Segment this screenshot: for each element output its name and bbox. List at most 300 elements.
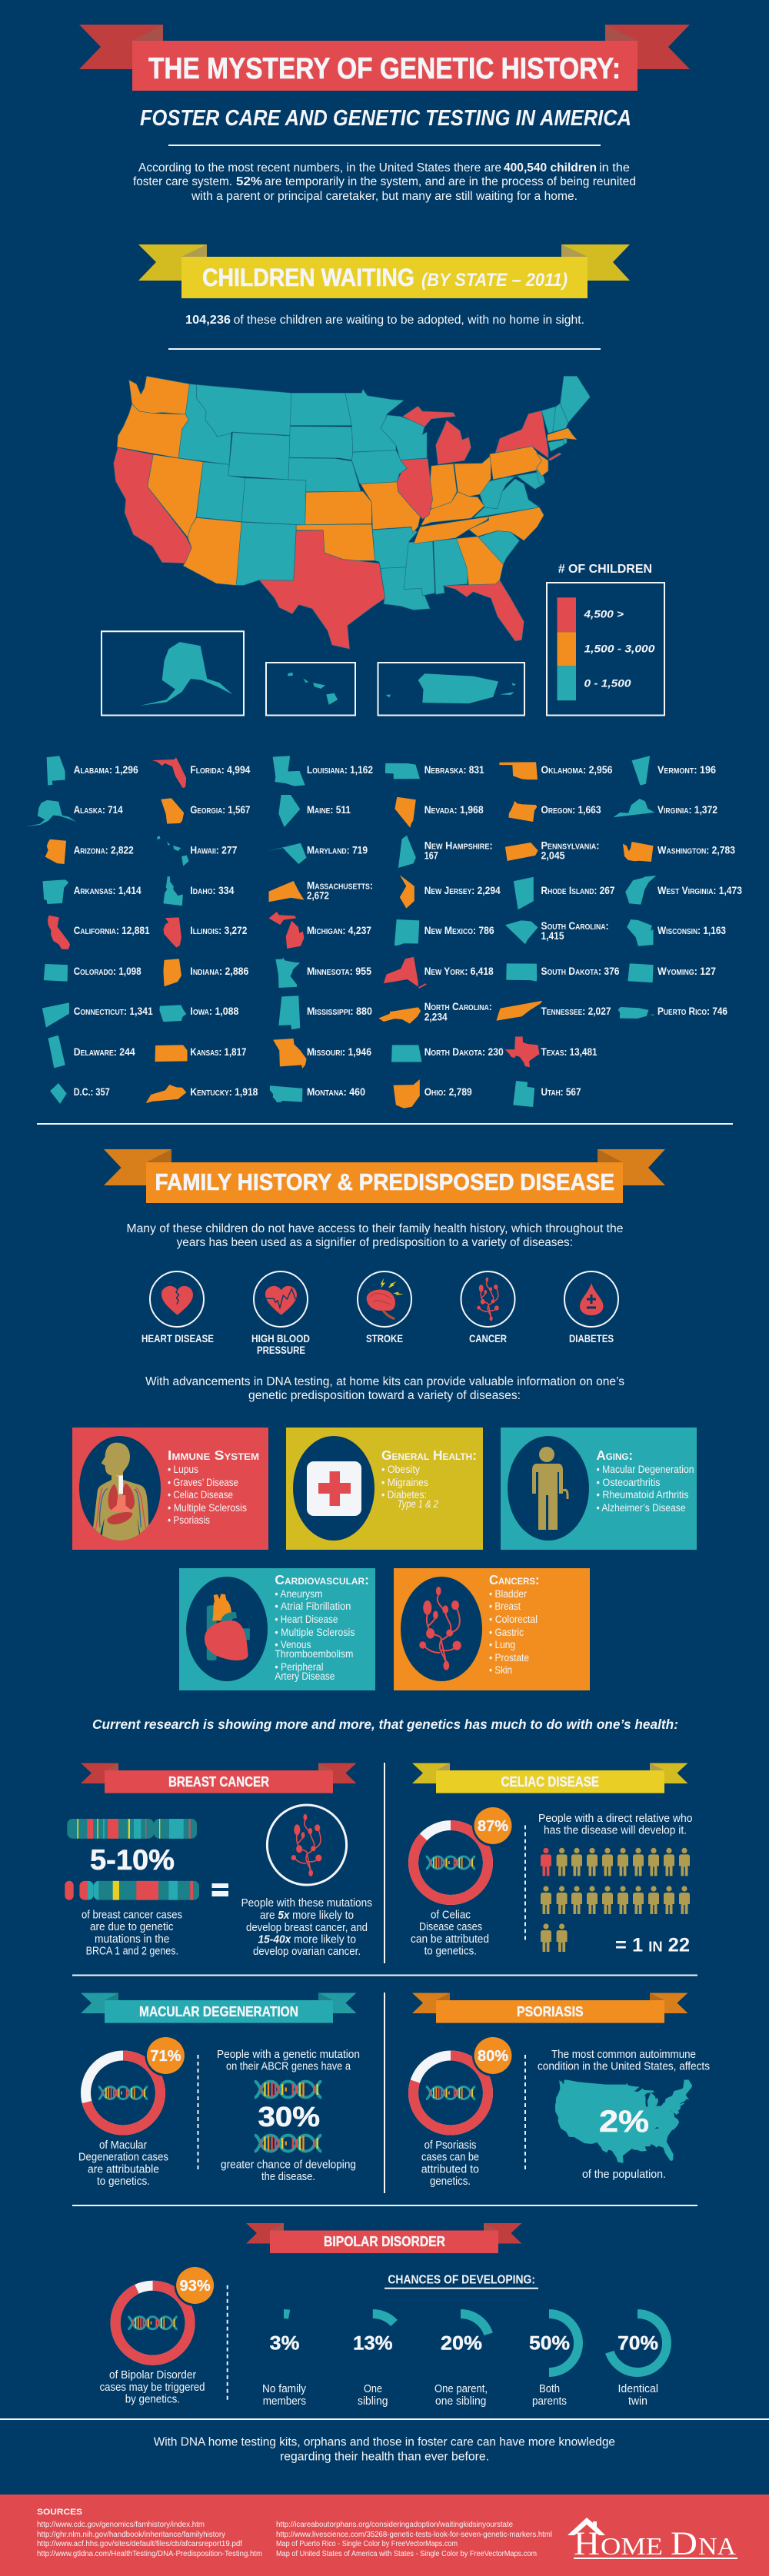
state: Iowa: Iowa: 1,088 <box>190 1005 239 1017</box>
panel: cancers: • Skin <box>489 1664 512 1676</box>
state: Vermont: Vermont: 196 <box>657 763 716 776</box>
state: Rhode Island <box>514 877 615 909</box>
research statement: Current research is showing more and more, that genetics has much to do with one’s health: <box>92 1717 678 1732</box>
breast cancer caption: mutations in the <box>95 1933 169 1946</box>
state: New Hampshire: New Hampshire: <box>424 839 493 851</box>
intro paragraph: in the <box>599 161 630 175</box>
state: Missouri: Missouri: 1,946 <box>307 1045 371 1058</box>
ABCR text with 30% stat: 30% <box>258 2101 320 2132</box>
state: North Carolina: North Carolina: <box>424 1000 492 1012</box>
sources: http://www.livescience.com/35268-genetic-tests-look-for-seven-genetic-markers.html <box>276 2531 552 2539</box>
autoimmune text: condition in the United States, affects <box>538 2060 710 2072</box>
title ribbon: THE MYSTERY OF GENETIC HISTORY: <box>148 52 621 85</box>
panel: psoriasis <box>412 1993 710 2188</box>
bipolar caption <box>100 2369 205 2406</box>
celiac caption <box>411 1910 489 1958</box>
state: Wisconsin <box>627 919 726 946</box>
logo: Home DNA: OME <box>601 2532 663 2560</box>
panel: cardiovascular: • Aneurysm <box>275 1588 322 1600</box>
state: Idaho <box>163 876 235 906</box>
ribbon: children waiting: CHILDREN WAITING <box>202 264 414 291</box>
legend: number of children: 0 - 1,500 <box>584 676 631 689</box>
panel: cardiovascular: • Atrial Fibrillation <box>275 1600 351 1612</box>
panel: bipolar disorder <box>100 2223 667 2408</box>
state: Tennessee <box>496 1001 611 1021</box>
ribbon: family history: FAMILY HISTORY & PREDISPOSED DISEASE <box>155 1168 614 1195</box>
macular caption: are attributable <box>88 2163 159 2175</box>
waiting statement: of these children are waiting to be adopted, with no home in sight. <box>234 314 584 327</box>
state: North Dakota <box>391 1045 504 1062</box>
arc: 13% one sibling <box>344 2314 402 2408</box>
panel: general health: General Health: <box>381 1448 477 1463</box>
state: Nebraska <box>385 763 484 779</box>
sources: http://icareaboutorphans.org/consideringadoption/waitingkidsinyourstate <box>276 2521 513 2529</box>
state: Louisiana: Louisiana: 1,162 <box>307 763 373 776</box>
stat: 5-10%: 5-10% <box>90 1844 175 1876</box>
state: Oklahoma: Oklahoma: 2,956 <box>541 763 613 776</box>
panel: cardiovascular: • Peripheral <box>275 1661 323 1673</box>
sources: sources <box>37 2505 82 2518</box>
donut: 71%: 71% <box>150 2048 181 2065</box>
panel: cardiovascular: • Multiple Sclerosis <box>275 1627 355 1638</box>
inset: Alaska box <box>102 631 244 715</box>
state: Utah <box>513 1081 581 1107</box>
state: Ohio <box>394 1079 472 1109</box>
arc: 20% one parent one sibling <box>431 2314 490 2408</box>
state: Minnesota <box>275 957 371 988</box>
panel: immune system: • Multiple Sclerosis <box>168 1502 247 1514</box>
state: Kentucky: Kentucky: 1,918 <box>190 1085 258 1098</box>
state: Nevada <box>394 797 484 828</box>
icon: cancer circle <box>267 1805 347 1885</box>
DNA testing paragraph: genetic predisposition toward a variety of diseases: <box>248 1389 521 1402</box>
ribbon: children waiting: (BY STATE – 2011) <box>421 270 568 291</box>
breast cancer caption: of breast cancer cases <box>82 1910 182 1922</box>
intro paragraph: According to the most recent numbers, in the United States there are <box>138 161 501 175</box>
icon: cancer <box>461 1271 515 1345</box>
state: Massachusetts: 2,672 <box>307 889 329 901</box>
ribbon: bipolar disorder: BIPOLAR DISORDER <box>324 2234 445 2249</box>
state: Texas: Texas: 13,481 <box>541 1045 598 1058</box>
sources: Map of United States of America with States - Single Color by FreeVectorMaps.com <box>276 2550 537 2558</box>
DNA testing paragraph: With advancements in DNA testing, at home kits can provide valuable information on one’s <box>145 1375 624 1388</box>
state: Puerto Rico <box>618 1005 727 1019</box>
icon: high blood pressure: HIGH BLOOD <box>251 1332 310 1345</box>
state: Virginia: Virginia: 1,372 <box>657 803 717 816</box>
icon: stroke <box>358 1271 411 1345</box>
bipolar caption: of Bipolar Disorder <box>109 2369 196 2382</box>
panel: cancers: • Colorectal <box>489 1614 538 1625</box>
icon: diabetes <box>564 1271 618 1345</box>
chromosome top <box>67 1819 197 1839</box>
panel: cancers: • Breast <box>489 1600 521 1612</box>
ribbon: macular degeneration: MACULAR DEGENERATION <box>139 2004 298 2019</box>
state: Michigan: Michigan: 4,237 <box>307 924 371 936</box>
ribbon: celiac disease <box>412 1763 687 1793</box>
panel: cardiovascular: • Heart Disease <box>275 1614 338 1625</box>
state: Alabama: Alabama: 1,296 <box>74 763 138 776</box>
state: North Carolina <box>378 1000 492 1024</box>
ABCR text with 30% stat <box>217 2049 360 2183</box>
state: Utah: Utah: 567 <box>541 1085 581 1098</box>
panel: cardiovascular: Cardiovascular: <box>275 1572 369 1587</box>
legend: number of children <box>547 563 664 715</box>
state: Connecticut: Connecticut: 1,341 <box>74 1005 153 1017</box>
logo: Home DNA: D <box>671 2526 697 2562</box>
panel: cardiovascular: Artery Disease <box>275 1670 335 1682</box>
state: Louisiana <box>273 756 373 786</box>
donut: 93%: 93% <box>180 2278 211 2295</box>
stat: 1 in 22: = 1 in 22 <box>615 1935 690 1956</box>
state: Indiana: Indiana: 2,886 <box>190 965 249 977</box>
arc: 3% no family members: 3% <box>270 2333 299 2355</box>
state: New Hampshire: 167 <box>424 849 438 862</box>
panel: aging: • Alzheimer’s Disease <box>597 1502 686 1514</box>
state: Alaska <box>25 800 123 826</box>
icon: high blood pressure <box>251 1271 310 1356</box>
state: California: California: 12,881 <box>74 924 150 936</box>
arc: 70% identical twin <box>608 2314 667 2408</box>
donut: 93% <box>115 2265 216 2360</box>
relative text <box>538 1813 693 1837</box>
state: Arizona <box>45 839 134 864</box>
arc: 13% one sibling: 13% <box>353 2333 393 2355</box>
equals sign <box>212 1883 228 1896</box>
autoimmune text: The most common autoimmune <box>551 2049 696 2061</box>
state: Colorado: Colorado: 1,098 <box>74 965 141 977</box>
state: Alabama <box>47 756 138 786</box>
ribbon: macular degeneration <box>81 1993 357 2023</box>
state: Connecticut <box>42 1002 153 1028</box>
state: Nevada: Nevada: 1,968 <box>424 803 484 816</box>
arc: 3% no family members: members <box>263 2395 306 2408</box>
mutation text <box>241 1897 372 1958</box>
sources: Map of Puerto Rico - Single Color by FreeVectorMaps.com <box>276 2540 458 2548</box>
panel: aging: • Osteoarthritis <box>597 1477 661 1488</box>
logo: Home DNA <box>568 2518 737 2562</box>
breast cancer caption <box>82 1910 182 1958</box>
state: New Jersey <box>400 875 501 909</box>
state: Missouri <box>273 1039 371 1069</box>
chromosome bottom <box>65 1881 199 1900</box>
panel: aging: • Macular Degeneration <box>597 1464 694 1475</box>
state: Oregon: Oregon: 1,663 <box>541 803 601 816</box>
legend: number of children: 4,500 > <box>583 608 624 620</box>
ribbon: breast cancer: BREAST CANCER <box>168 1774 269 1790</box>
mutation text: are 5x more likely to <box>260 1910 354 1922</box>
arc: 13% one sibling: One <box>364 2383 382 2395</box>
state: Ohio: Ohio: 2,789 <box>424 1085 472 1098</box>
sources: http://www.acf.hhs.gov/sites/default/files/cb/afcarsreport19.pdf <box>37 2540 242 2548</box>
icon: high blood pressure: PRESSURE <box>257 1344 305 1356</box>
state: Wyoming: Wyoming: 127 <box>657 965 716 977</box>
family history paragraph: Many of these children do not have access to their family health history, which throughout the <box>126 1222 623 1235</box>
state: Pennsylvania: Pennsylvania: <box>541 839 600 851</box>
ribbon: children waiting <box>138 244 630 298</box>
bipolar caption: by genetics. <box>125 2394 180 2406</box>
macular caption: to genetics. <box>97 2175 150 2188</box>
intro paragraph: with a parent or principal caretaker, but many are still waiting for a home. <box>191 190 578 203</box>
state: Nebraska: Nebraska: 831 <box>424 763 484 776</box>
donut: 80% <box>414 2035 514 2130</box>
sources: http://www.gtldna.com/HealthTesting/DNA-Predisposition-Testing.htm <box>37 2550 262 2558</box>
icon: stroke: STROKE <box>366 1332 403 1345</box>
state: Washington: Washington: 2,783 <box>657 844 735 856</box>
psoriasis caption <box>421 2139 479 2188</box>
state: New Hampshire <box>398 836 493 868</box>
US silhouette with 2% <box>555 2080 692 2163</box>
state: Pennsylvania <box>505 839 600 862</box>
state: Montana <box>270 1085 365 1102</box>
arc: 3% no family members <box>255 2314 313 2408</box>
illustration: torso with lungs <box>93 1442 149 1541</box>
state: Arkansas: Arkansas: 1,414 <box>74 884 141 896</box>
panel: general health: • Obesity <box>381 1464 420 1475</box>
state: Hawaii: Hawaii: 277 <box>190 844 238 856</box>
panel: macular degeneration <box>78 1993 360 2188</box>
arc: 13% one sibling: sibling <box>358 2395 388 2408</box>
state: Montana: Montana: 460 <box>307 1085 365 1098</box>
state: Florida: Florida: 4,994 <box>190 763 251 776</box>
state: Rhode Island: Rhode Island: 267 <box>541 884 615 896</box>
title ribbon <box>79 25 690 91</box>
celiac caption: to genetics. <box>424 1946 477 1958</box>
relative text: has the disease will develop it. <box>544 1825 687 1837</box>
state: Minnesota: Minnesota: 955 <box>307 965 371 977</box>
state: Pennsylvania: 2,045 <box>541 849 565 862</box>
autoimmune text <box>538 2049 710 2072</box>
arc: 70% identical twin: 70% <box>618 2333 658 2355</box>
population text: of the population. <box>582 2169 666 2181</box>
panel: immune system: Immune System <box>168 1448 259 1463</box>
chances heading: CHANCES OF DEVELOPING: <box>388 2274 535 2287</box>
icon: elderly man <box>532 1447 568 1530</box>
icon: diabetes: DIABETES <box>569 1332 614 1345</box>
state: Colorado <box>44 964 141 982</box>
panel: immune system: • Graves’ Disease <box>168 1477 238 1488</box>
breast cancer caption: BRCA 1 and 2 genes. <box>86 1946 178 1958</box>
ABCR text with 30% stat: greater chance of developing <box>221 2159 356 2172</box>
arc: 70% identical twin: twin <box>628 2395 647 2408</box>
panel: cancers: • Lung <box>489 1639 515 1650</box>
arc: 50% both parents: parents <box>532 2395 567 2408</box>
state: Maryland: Maryland: 719 <box>307 844 368 856</box>
legend: number of children: # OF CHILDREN <box>558 563 652 576</box>
ribbon: psoriasis <box>412 1993 687 2023</box>
ribbon: celiac disease: CELIAC DISEASE <box>501 1774 599 1790</box>
icon: heart disease <box>141 1271 214 1345</box>
state: New Mexico <box>394 919 494 946</box>
state: Illinois <box>163 917 248 948</box>
mutation text: People with these mutations <box>241 1897 372 1910</box>
icon: heart organ <box>205 1594 250 1660</box>
state: South Dakota: South Dakota: 376 <box>541 965 620 977</box>
arc: 20% one parent one sibling: one sibling <box>435 2395 486 2408</box>
state: Georgia <box>161 798 251 824</box>
state: Arizona: Arizona: 2,822 <box>74 844 134 856</box>
footer <box>0 2495 769 2576</box>
state: Massachusetts <box>269 879 373 902</box>
state: Wyoming <box>628 963 716 982</box>
donut: 80%: 80% <box>478 2048 508 2065</box>
arc: 70% identical twin: Identical <box>618 2383 658 2395</box>
panel: general health: • Migraines <box>381 1477 428 1488</box>
state: New Jersey: New Jersey: 2,294 <box>424 884 501 896</box>
state: Michigan <box>269 912 371 949</box>
arc: 50% both parents: 50% <box>529 2333 570 2355</box>
state: Florida <box>152 757 251 788</box>
state: Mississippi <box>278 995 372 1029</box>
panel: aging: • Rheumatoid Arthritis <box>597 1489 689 1501</box>
closing statement <box>154 2436 615 2464</box>
intro paragraph <box>133 161 636 203</box>
panel: immune system: • Psoriasis <box>168 1514 210 1526</box>
state: West Virginia <box>625 876 742 905</box>
family history paragraph <box>126 1222 623 1249</box>
panel: general health: • Diabetes: <box>381 1489 427 1501</box>
state: South Carolina: South Carolina: <box>541 919 609 932</box>
state: Indiana <box>163 959 249 986</box>
panel: general health <box>286 1428 483 1550</box>
state: Tennessee: Tennessee: 2,027 <box>541 1005 611 1017</box>
state: New York: New York: 6,418 <box>424 965 494 977</box>
inset: Hawaii box <box>266 663 355 715</box>
panel: immune system: • Lupus <box>168 1464 198 1475</box>
state: North Dakota: North Dakota: 230 <box>424 1045 504 1058</box>
panel: aging: Aging: <box>597 1448 633 1463</box>
celiac caption: can be attributed <box>411 1933 489 1946</box>
state: Idaho: Idaho: 334 <box>190 884 235 896</box>
arc: 20% one parent one sibling: 20% <box>441 2333 482 2355</box>
intro paragraph: are temporarily in the system, and are in the process of being reunited <box>265 175 636 188</box>
panel: cancers <box>394 1568 590 1690</box>
state: North Carolina: 2,234 <box>424 1011 448 1023</box>
state: Virginia <box>613 799 717 817</box>
state: D.C.: D.C.: 357 <box>74 1085 110 1098</box>
logo: Home DNA: NA <box>698 2532 736 2560</box>
state: D.C. <box>50 1083 110 1104</box>
US map <box>114 376 590 706</box>
ABCR text with 30% stat: People with a genetic mutation <box>217 2049 360 2061</box>
panel: cancers: • Bladder <box>489 1588 527 1600</box>
psoriasis caption: of Psoriasis <box>424 2139 477 2152</box>
panel: cancers: • Gastric <box>489 1627 524 1638</box>
state: Washington <box>623 842 735 862</box>
donut: 87% <box>414 1805 514 1900</box>
arc: 3% no family members: No family <box>262 2383 307 2395</box>
donut: 71% <box>86 2035 186 2130</box>
state: Vermont <box>632 756 716 786</box>
psoriasis caption: genetics. <box>430 2175 471 2188</box>
panel: cardiovascular: Thromboembolism <box>275 1648 353 1660</box>
panel: breast cancer <box>65 1763 372 1958</box>
icon: medical cross <box>307 1461 361 1516</box>
panel: general health: Type 1 & 2 <box>398 1498 438 1510</box>
state: Alaska: Alaska: 714 <box>74 803 123 816</box>
state: New Mexico: New Mexico: 786 <box>424 924 494 936</box>
state: South Carolina: 1,415 <box>541 929 564 942</box>
state: Iowa <box>159 1005 239 1022</box>
US silhouette with 2%: 2% <box>599 2105 649 2139</box>
state: Kansas <box>155 1045 247 1062</box>
panel: aging <box>501 1428 697 1550</box>
state: Mississippi: Mississippi: 880 <box>307 1005 372 1017</box>
arc: 50% both parents <box>520 2314 578 2408</box>
celiac caption: Disease cases <box>419 1921 482 1933</box>
state: Massachusetts: Massachusetts: <box>307 879 373 891</box>
mutation text: develop breast cancer, and <box>246 1922 368 1934</box>
breast cancer caption: are due to genetic <box>90 1921 174 1933</box>
ribbon: bipolar disorder <box>246 2223 521 2253</box>
state: South Carolina <box>505 919 609 944</box>
sources: http://ghr.nlm.nih.gov/handbook/inheritance/familyhistory <box>37 2531 225 2539</box>
waiting statement: 104,236 <box>185 314 231 327</box>
state: Maryland <box>268 843 368 864</box>
closing statement: regarding their health than ever before. <box>280 2451 489 2464</box>
panel: cardiovascular: • Venous <box>275 1639 311 1650</box>
inset: Puerto Rico box <box>378 663 524 715</box>
bipolar caption: cases may be triggered <box>100 2382 205 2394</box>
panel: immune system <box>72 1428 268 1550</box>
state: Georgia: Georgia: 1,567 <box>190 803 251 816</box>
icon: heart disease: HEART DISEASE <box>141 1332 214 1345</box>
sources <box>37 2505 552 2558</box>
arc: 50% both parents: Both <box>539 2383 560 2395</box>
family history paragraph: years has been used as a signifier of predisposition to a variety of diseases: <box>177 1236 573 1249</box>
donut: 87%: 87% <box>478 1818 508 1835</box>
psoriasis caption: attributed to <box>421 2163 479 2175</box>
state: Oregon <box>508 801 601 822</box>
mutation text: develop ovarian cancer. <box>253 1946 361 1958</box>
macular caption: of Macular <box>99 2139 147 2152</box>
state: West Virginia: West Virginia: 1,473 <box>657 884 742 896</box>
ribbon: family history <box>104 1149 665 1203</box>
intro paragraph: 52% <box>236 175 262 188</box>
state list <box>25 756 742 1109</box>
panel: cardiovascular <box>179 1568 375 1690</box>
state: Illinois: Illinois: 3,272 <box>190 924 248 936</box>
macular caption: Degeneration cases <box>78 2152 168 2164</box>
macular caption <box>78 2139 168 2188</box>
logo: Home DNA: H <box>574 2526 600 2562</box>
state: Kentucky <box>146 1085 258 1103</box>
state: Texas <box>505 1036 598 1067</box>
state: Hawaii <box>157 836 238 866</box>
intro paragraph: foster care system. <box>133 175 232 188</box>
state: South Dakota <box>506 963 620 982</box>
mutation text: 15-40x more likely to <box>258 1934 356 1946</box>
legend: number of children: 1,500 - 3,000 <box>584 642 655 654</box>
intro paragraph: 400,540 children <box>504 161 597 175</box>
state: Wisconsin: Wisconsin: 1,163 <box>657 924 726 936</box>
celiac caption: of Celiac <box>431 1910 471 1922</box>
people pictogram <box>541 1848 690 1952</box>
icon: cancer: CANCER <box>469 1332 507 1345</box>
state: Puerto Rico: Puerto Rico: 746 <box>657 1005 727 1017</box>
arc: 20% one parent one sibling: One parent, <box>434 2383 488 2395</box>
panel: cancers: • Prostate <box>489 1652 529 1664</box>
state: Maine <box>278 795 351 827</box>
state: Maine: Maine: 511 <box>307 803 351 816</box>
state: Delaware: Delaware: 244 <box>74 1045 135 1058</box>
ABCR text with 30% stat: on their ABCR genes have a <box>226 2060 351 2072</box>
closing statement: With DNA home testing kits, orphans and those in foster care can have more knowledge <box>154 2436 615 2449</box>
ribbon: psoriasis: PSORIASIS <box>517 2004 584 2019</box>
ribbon: breast cancer <box>81 1763 357 1793</box>
state: Kansas: Kansas: 1,817 <box>190 1045 247 1058</box>
relative text: People with a direct relative who <box>538 1813 693 1825</box>
state: California <box>48 916 150 949</box>
